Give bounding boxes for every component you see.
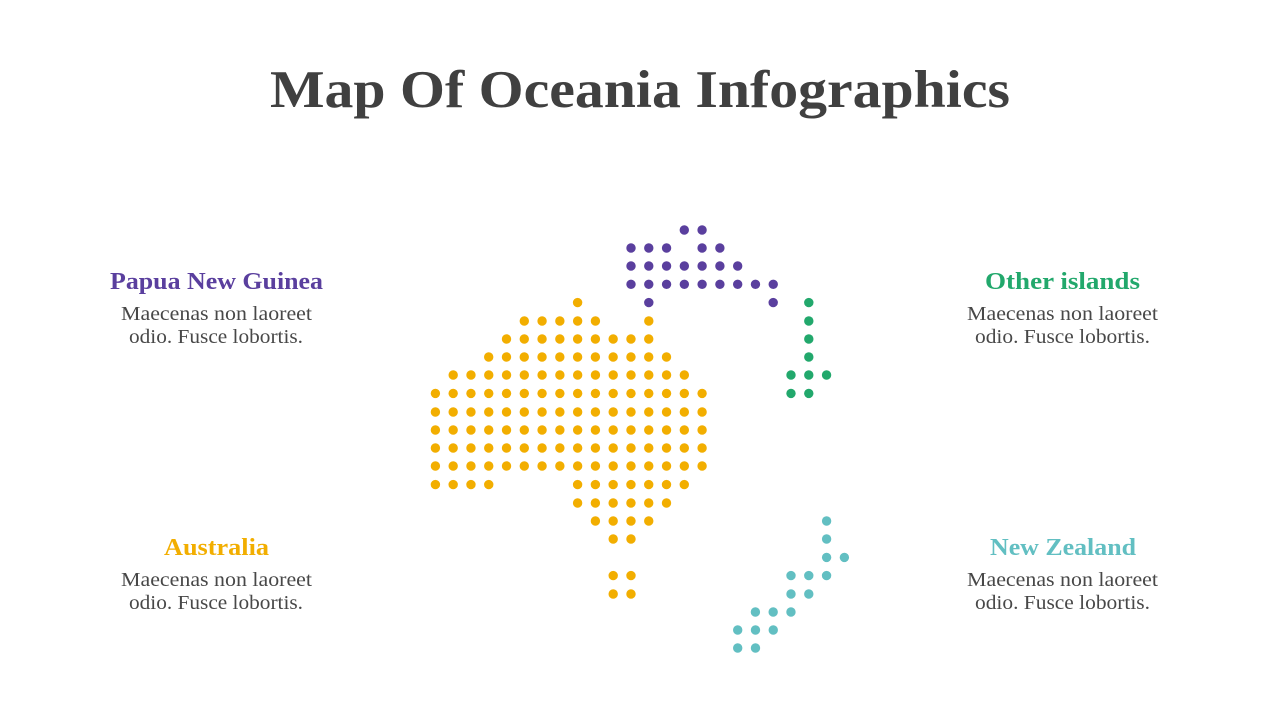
- description: Maecenas non laoreet: [121, 303, 312, 325]
- map region: Australia dots: [435, 303, 703, 594]
- heading: Other islands: [985, 268, 1140, 295]
- description: odio. Fusce lobortis.: [129, 592, 303, 614]
- heading: Australia: [164, 534, 269, 561]
- heading: Papua New Guinea: [110, 268, 323, 295]
- dot map of Oceania: [435, 230, 846, 648]
- description: odio. Fusce lobortis.: [129, 326, 303, 348]
- title: Map Of Oceania Infographics: [270, 61, 1010, 119]
- map region: New Zealand dots: [738, 521, 846, 648]
- description: [121, 303, 312, 348]
- description: Maecenas non laoreet: [967, 569, 1158, 591]
- map region: Other islands dots: [791, 303, 828, 393]
- label: Other islands: [967, 268, 1158, 348]
- description: [121, 569, 312, 614]
- description: odio. Fusce lobortis.: [975, 592, 1150, 614]
- description: Maecenas non laoreet: [967, 303, 1158, 325]
- description: Maecenas non laoreet: [121, 569, 312, 591]
- description: [967, 569, 1158, 614]
- heading: New Zealand: [990, 534, 1136, 561]
- label: Australia: [121, 534, 312, 614]
- description: odio. Fusce lobortis.: [975, 326, 1150, 348]
- description: [967, 303, 1158, 348]
- map region: Papua New Guinea dots: [631, 230, 774, 303]
- label: Papua New Guinea: [110, 268, 323, 348]
- label: New Zealand: [967, 534, 1158, 614]
